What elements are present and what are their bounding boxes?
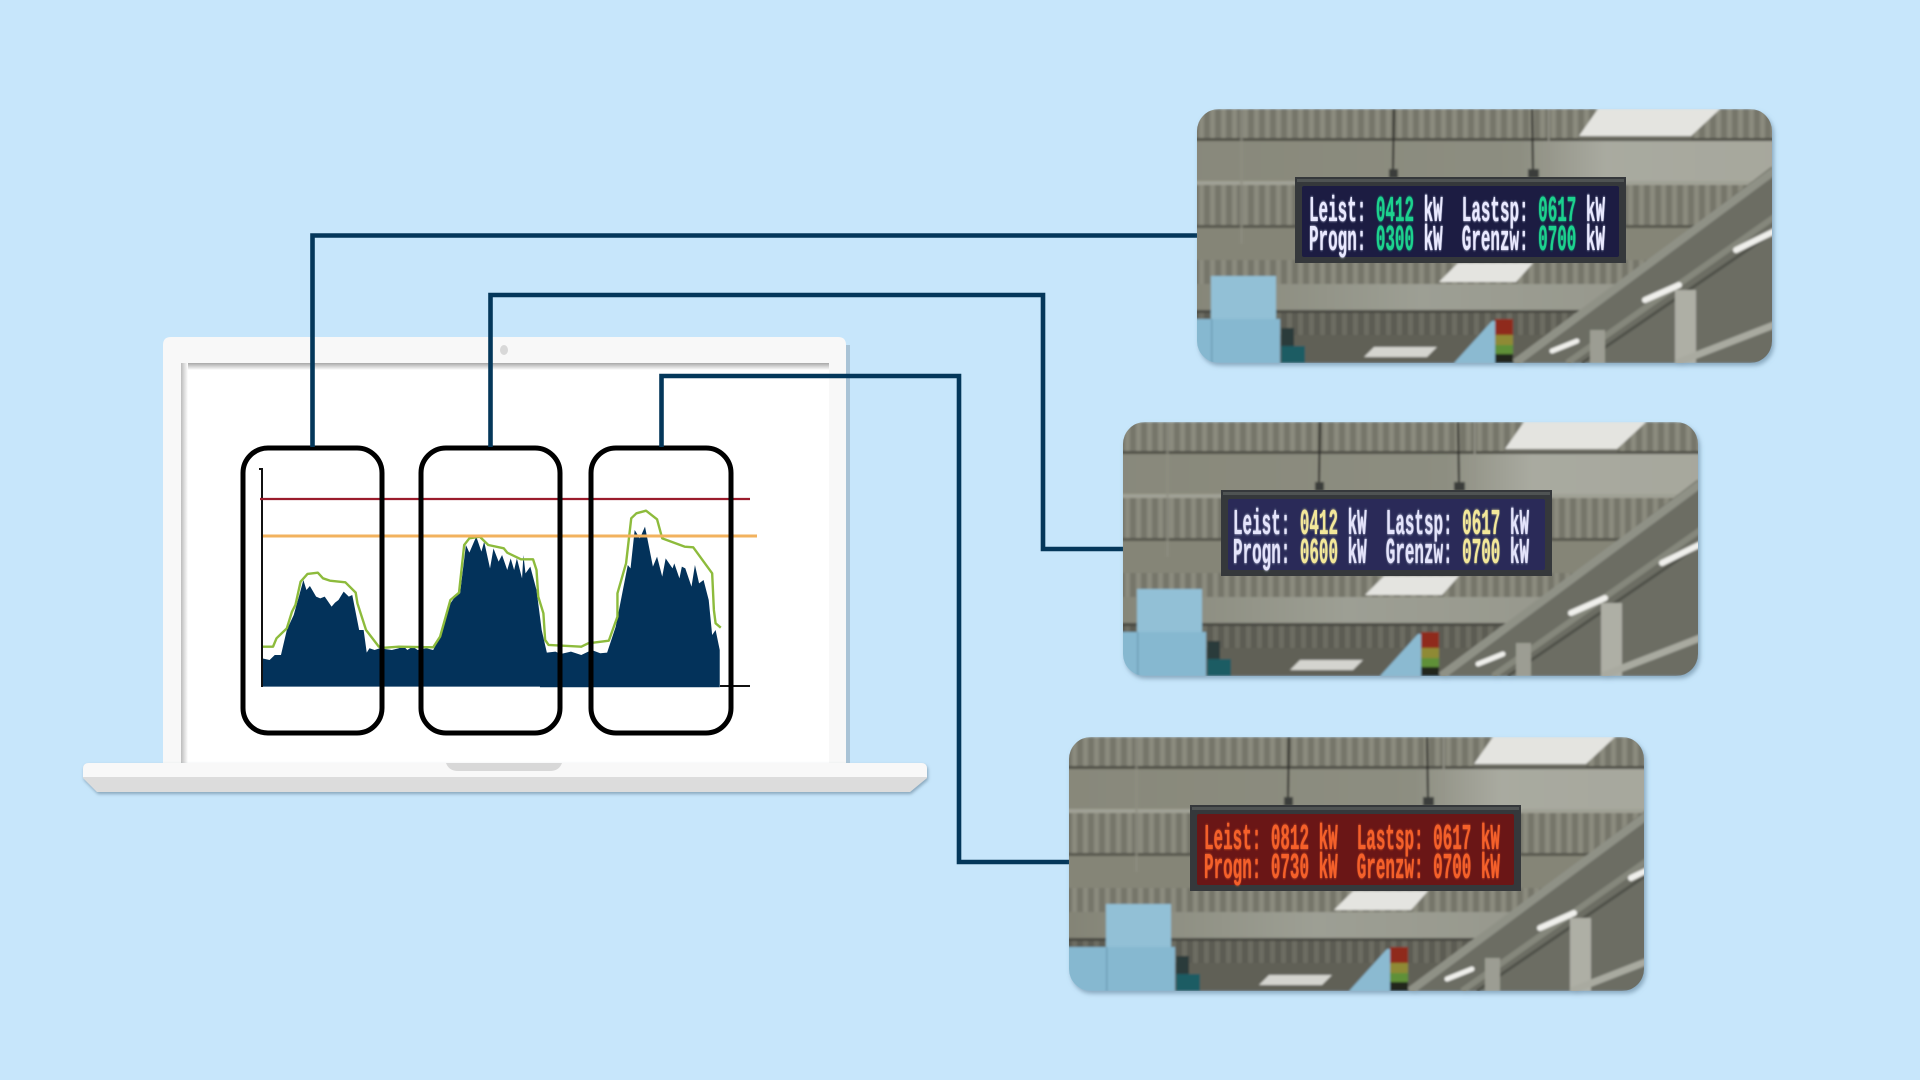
- threshold line orange: [263, 534, 757, 538]
- time window 2: [421, 448, 560, 733]
- panel: display red state: [1068, 737, 1648, 996]
- led text line 2: Progn: 0600 kW Grenzw: 0700 kW: [1233, 535, 1529, 575]
- led text line 1: Leist: 0412 kW Lastsp: 0617 kW: [1309, 193, 1605, 233]
- load chart: [259, 469, 757, 687]
- camera: [500, 345, 508, 355]
- panel: display yellow state: [1122, 422, 1702, 682]
- connector 1: [312, 236, 1200, 447]
- laptop: [83, 337, 927, 792]
- x axis: [720, 685, 750, 687]
- panel: display green state: [1196, 109, 1776, 368]
- led screen: [1302, 186, 1619, 257]
- time window 3: [591, 448, 731, 733]
- forecast line: [263, 511, 721, 648]
- load profile area: [262, 527, 720, 687]
- laptop screen: [181, 363, 829, 763]
- led screen: [1197, 814, 1514, 885]
- led text line 2: Progn: 0300 kW Grenzw: 0700 kW: [1309, 222, 1605, 262]
- led screen: [1228, 499, 1545, 570]
- time window 1: [243, 448, 382, 733]
- infographic canvas: [82, 109, 1776, 996]
- limit line red: [260, 498, 750, 500]
- led text line 2: Progn: 0730 kW Grenzw: 0700 kW: [1204, 850, 1500, 890]
- led text line 1: Leist: 0412 kW Lastsp: 0617 kW: [1233, 506, 1529, 546]
- connector 3: [662, 376, 1072, 862]
- y axis: [259, 469, 262, 687]
- laptop lid: [163, 337, 846, 763]
- laptop base: [83, 763, 927, 792]
- led text line 1: Leist: 0812 kW Lastsp: 0617 kW: [1204, 821, 1500, 861]
- connector 2: [490, 295, 1126, 549]
